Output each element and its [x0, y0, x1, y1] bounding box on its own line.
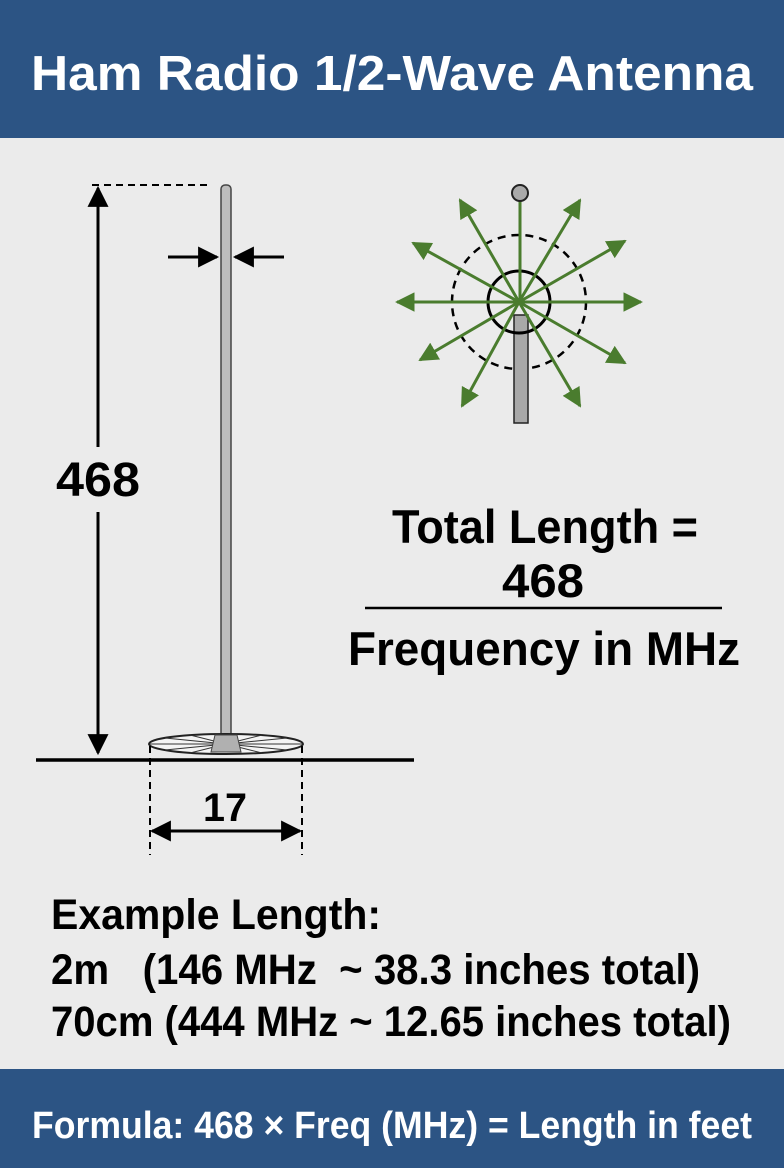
ground line	[36, 758, 414, 762]
example lengths: 70cm (444 MHz ~ 12.65 inches total)	[51, 998, 731, 1046]
base dimension: 17	[203, 786, 247, 830]
formula: Total Length =	[392, 500, 698, 553]
example lengths: 2m (146 MHz ~ 38.3 inches total)	[51, 946, 700, 994]
footer	[0, 1069, 784, 1168]
base plate	[149, 734, 303, 754]
formula: 468	[502, 554, 584, 607]
example lengths: Example Length:	[51, 891, 381, 939]
height dimension: 468	[56, 454, 140, 507]
formula	[348, 500, 740, 675]
title: Ham Radio 1/2-Wave Antenna	[31, 47, 754, 101]
formula: Frequency in MHz	[348, 622, 740, 675]
example lengths	[51, 891, 731, 1046]
mast	[221, 185, 231, 737]
antenna diagram	[36, 185, 414, 855]
header	[0, 0, 784, 138]
footer: Formula: 468 × Freq (MHz) = Length in feet	[32, 1105, 752, 1147]
icon: radiation pattern	[397, 185, 641, 423]
width arrows	[168, 256, 284, 258]
